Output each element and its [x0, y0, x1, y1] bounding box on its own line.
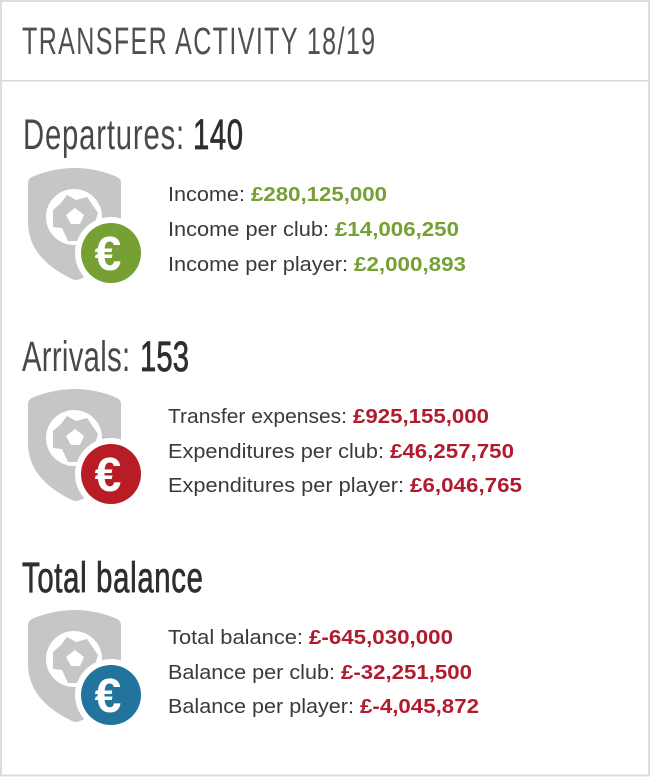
title: TRANSFER ACTIVITY 18/19 — [22, 20, 375, 62]
balance stats: Balance per club: — [168, 662, 335, 684]
expense stats — [168, 406, 522, 497]
icon: shield with football and red euro: € — [95, 449, 121, 502]
balance stats — [168, 627, 479, 718]
heading: arrivals: Arrivals: — [22, 332, 130, 380]
heading: arrivals — [22, 332, 189, 380]
panel: total balance — [22, 553, 479, 731]
heading: arrivals: 153 — [140, 332, 189, 380]
income stats: £14,006,250 — [335, 219, 459, 241]
balance stats: Balance per player: — [168, 696, 354, 718]
income stats: £280,125,000 — [251, 184, 387, 206]
income stats: Income per club: — [168, 219, 329, 241]
panel: departures — [23, 110, 466, 289]
expense stats: Transfer expenses: — [168, 406, 347, 428]
balance stats: £-32,251,500 — [341, 662, 472, 684]
heading: total balance: Total balance — [22, 553, 203, 601]
expense stats: £46,257,750 — [390, 441, 514, 463]
balance stats: £-645,030,000 — [309, 627, 453, 649]
panel: arrivals — [22, 332, 522, 510]
icon: shield with football and green euro: € — [95, 228, 121, 281]
expense stats: Expenditures per player: — [168, 475, 404, 497]
income stats: Income per player: — [168, 254, 348, 276]
icon: shield with football and green euro — [28, 168, 147, 289]
expense stats: Expenditures per club: — [168, 441, 384, 463]
income stats: Income: — [168, 184, 245, 206]
balance stats: £-4,045,872 — [360, 696, 479, 718]
heading: departures: 140 — [193, 110, 243, 158]
expense stats: £6,046,765 — [410, 475, 522, 497]
expense stats: £925,155,000 — [353, 406, 489, 428]
income stats — [168, 184, 466, 276]
icon: shield with football and blue euro — [28, 610, 147, 731]
balance stats: Total balance: — [168, 627, 303, 649]
income stats: £2,000,893 — [354, 254, 466, 276]
icon: shield with football and red euro — [28, 389, 147, 510]
icon: shield with football and blue euro: € — [95, 670, 121, 723]
heading: departures: Departures: — [23, 110, 184, 158]
